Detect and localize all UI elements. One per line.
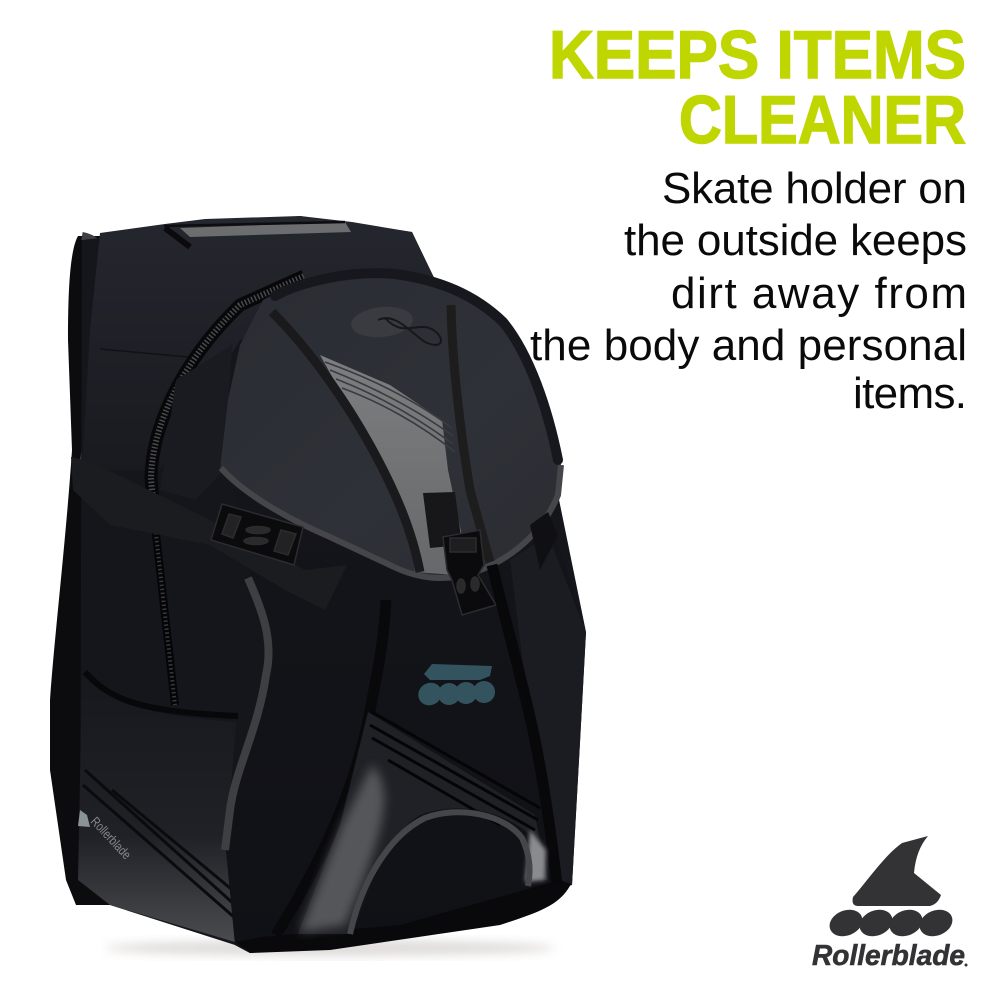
body text: items. (853, 369, 967, 418)
logo fin (853, 836, 941, 906)
top zip pocket (164, 222, 351, 247)
logo wordmark: Rollerblade (812, 940, 965, 972)
pocket panel under flap (160, 345, 232, 500)
lower zipper teeth (155, 525, 175, 705)
flap right tab (530, 512, 558, 570)
body text: the outside keeps (624, 216, 967, 265)
seam (100, 349, 188, 357)
right side gusset (510, 535, 586, 885)
flap edge trim (221, 465, 561, 578)
front panel (226, 480, 585, 953)
side buckle (211, 504, 303, 565)
heading: CLEANER (679, 82, 966, 158)
upper back panel (82, 216, 436, 470)
lower zipper (155, 525, 175, 705)
bottom arch trim (350, 812, 530, 934)
body text: dirt away from (671, 269, 967, 318)
strap edge (82, 236, 102, 460)
body text: the body and personal (530, 321, 967, 370)
shoulder straps (50, 236, 110, 905)
pocket brand: Rollerblade (88, 814, 134, 862)
heading: KEEPS ITEMS (549, 17, 966, 93)
gloss highlight (300, 765, 384, 932)
body text (530, 164, 967, 418)
glossy panel (298, 712, 548, 934)
pocket rim (85, 672, 238, 716)
teal logo (414, 664, 499, 710)
front right strap (492, 565, 557, 885)
gloss highlight right (525, 830, 546, 882)
center buckle (443, 530, 496, 615)
flap left webbing (272, 312, 420, 572)
front strap (71, 457, 347, 610)
gloss stripes (370, 712, 540, 830)
grey flap strip (320, 355, 465, 575)
body text: Skate holder on (662, 164, 967, 213)
grey side trim (225, 578, 269, 850)
backpack photo (50, 216, 586, 956)
heading (549, 17, 966, 158)
top flap (220, 270, 561, 578)
pocket stripes (83, 770, 236, 918)
bottom base (236, 880, 571, 953)
Rollerblade logo (812, 836, 968, 972)
flap top binding (275, 273, 558, 460)
pocket brand (78, 810, 134, 862)
registered mark (964, 964, 968, 966)
zipper (151, 276, 304, 525)
ground shadow (105, 940, 555, 956)
strip lines (325, 362, 455, 452)
front centre strap (276, 600, 386, 935)
lace holder (350, 304, 441, 345)
body underlay (80, 216, 586, 953)
logo wheels (826, 905, 956, 941)
zipper teeth (151, 276, 304, 525)
flap right webbing (451, 305, 490, 562)
side pocket (78, 675, 236, 942)
center buckle strap (423, 492, 462, 548)
